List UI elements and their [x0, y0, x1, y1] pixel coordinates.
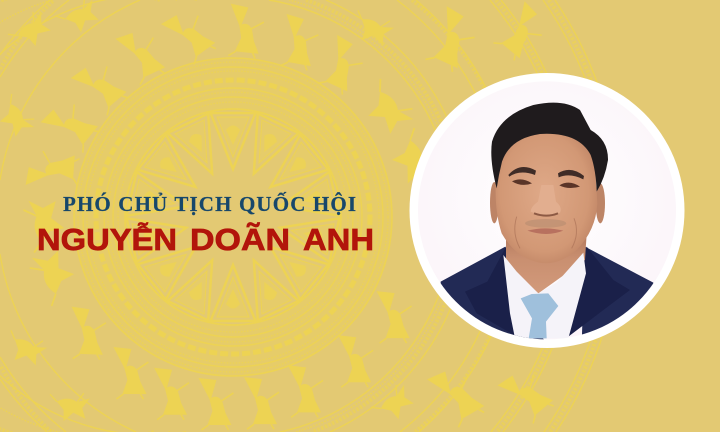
- drum inner band: [74, 58, 392, 376]
- nose: [531, 185, 561, 215]
- suit: [440, 246, 654, 340]
- hair: [491, 103, 608, 192]
- title: name: NGUYỄN: [37, 222, 177, 257]
- portrait frame: [410, 73, 684, 348]
- star rays: [127, 113, 339, 321]
- brows: [508, 167, 584, 179]
- outer motifs: [0, 0, 558, 429]
- title: name: ANH: [303, 222, 374, 257]
- shirt: [503, 253, 586, 338]
- eyes: [512, 179, 580, 188]
- mouth: [527, 228, 563, 234]
- smile lines: [515, 217, 577, 248]
- face: [496, 128, 597, 263]
- figures ring: [23, 4, 439, 430]
- title: position: PHÓ CHỦ TỊCH QUỐC HỘI: [63, 192, 356, 216]
- upper lip shadow: [525, 219, 566, 228]
- title: name: DOÃN: [190, 222, 290, 257]
- portrait photo: [418, 81, 676, 360]
- neck: [506, 238, 586, 294]
- tie: [521, 293, 558, 338]
- ears: [490, 182, 498, 224]
